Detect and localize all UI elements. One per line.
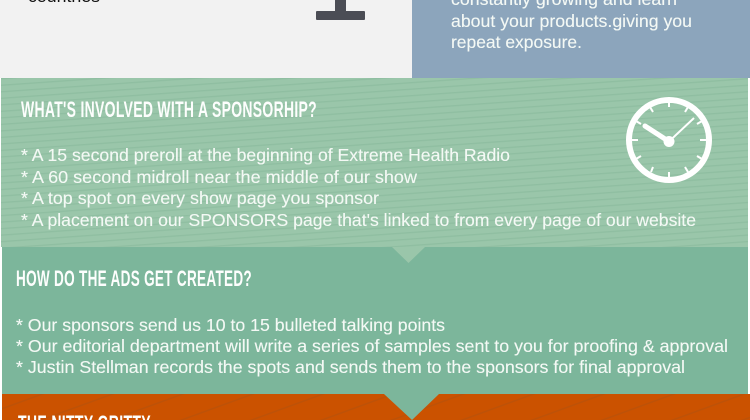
text: sponsorship bullets: * A 15 second preroll at the beginning of Extreme Health Radio [21, 145, 510, 165]
text: sponsorship bullets: * A 60 second midroll near the middle of our show [21, 167, 418, 187]
panel: blue exposure text: repeat exposure. [451, 32, 582, 52]
arrow: green pointer [392, 247, 425, 263]
heading: how do the ads get created: HOW DO THE ADS GET CREATED? [16, 266, 252, 291]
panel: blue exposure text [412, 0, 750, 78]
text: ad creation bullets [16, 315, 728, 377]
text: sponsorship bullets: * A top spot on every show page you sponsor [21, 188, 379, 208]
text: sponsorship bullets: * A placement on our SPONSORS page that's linked to from every page of our website [21, 210, 696, 230]
text: ad creation bullets: * Our editorial department will write a series of samples sent to you for proofing & approval [16, 336, 728, 356]
panel: the nitty gritty [2, 394, 750, 420]
heading: what's involved: WHAT'S INVOLVED WITH A SPONSORHIP? [21, 97, 317, 122]
panel: blue exposure text: about your products.giving you [451, 11, 692, 31]
panel: what's involved with a sponsorship [1, 78, 748, 247]
panel: how do the ads get created [2, 247, 748, 394]
arrow: teal pointer [384, 394, 439, 420]
icon: stand base [316, 0, 365, 20]
icon: clock [629, 100, 709, 180]
panel: top left stat panel [0, 0, 412, 78]
text: sponsorship bullets [21, 145, 696, 230]
text: ad creation bullets: * Justin Stellman records the spots and sends them to the sponsors for final approval [16, 357, 685, 377]
text: ad creation bullets: * Our sponsors send us 10 to 15 bulleted talking points [16, 315, 445, 335]
